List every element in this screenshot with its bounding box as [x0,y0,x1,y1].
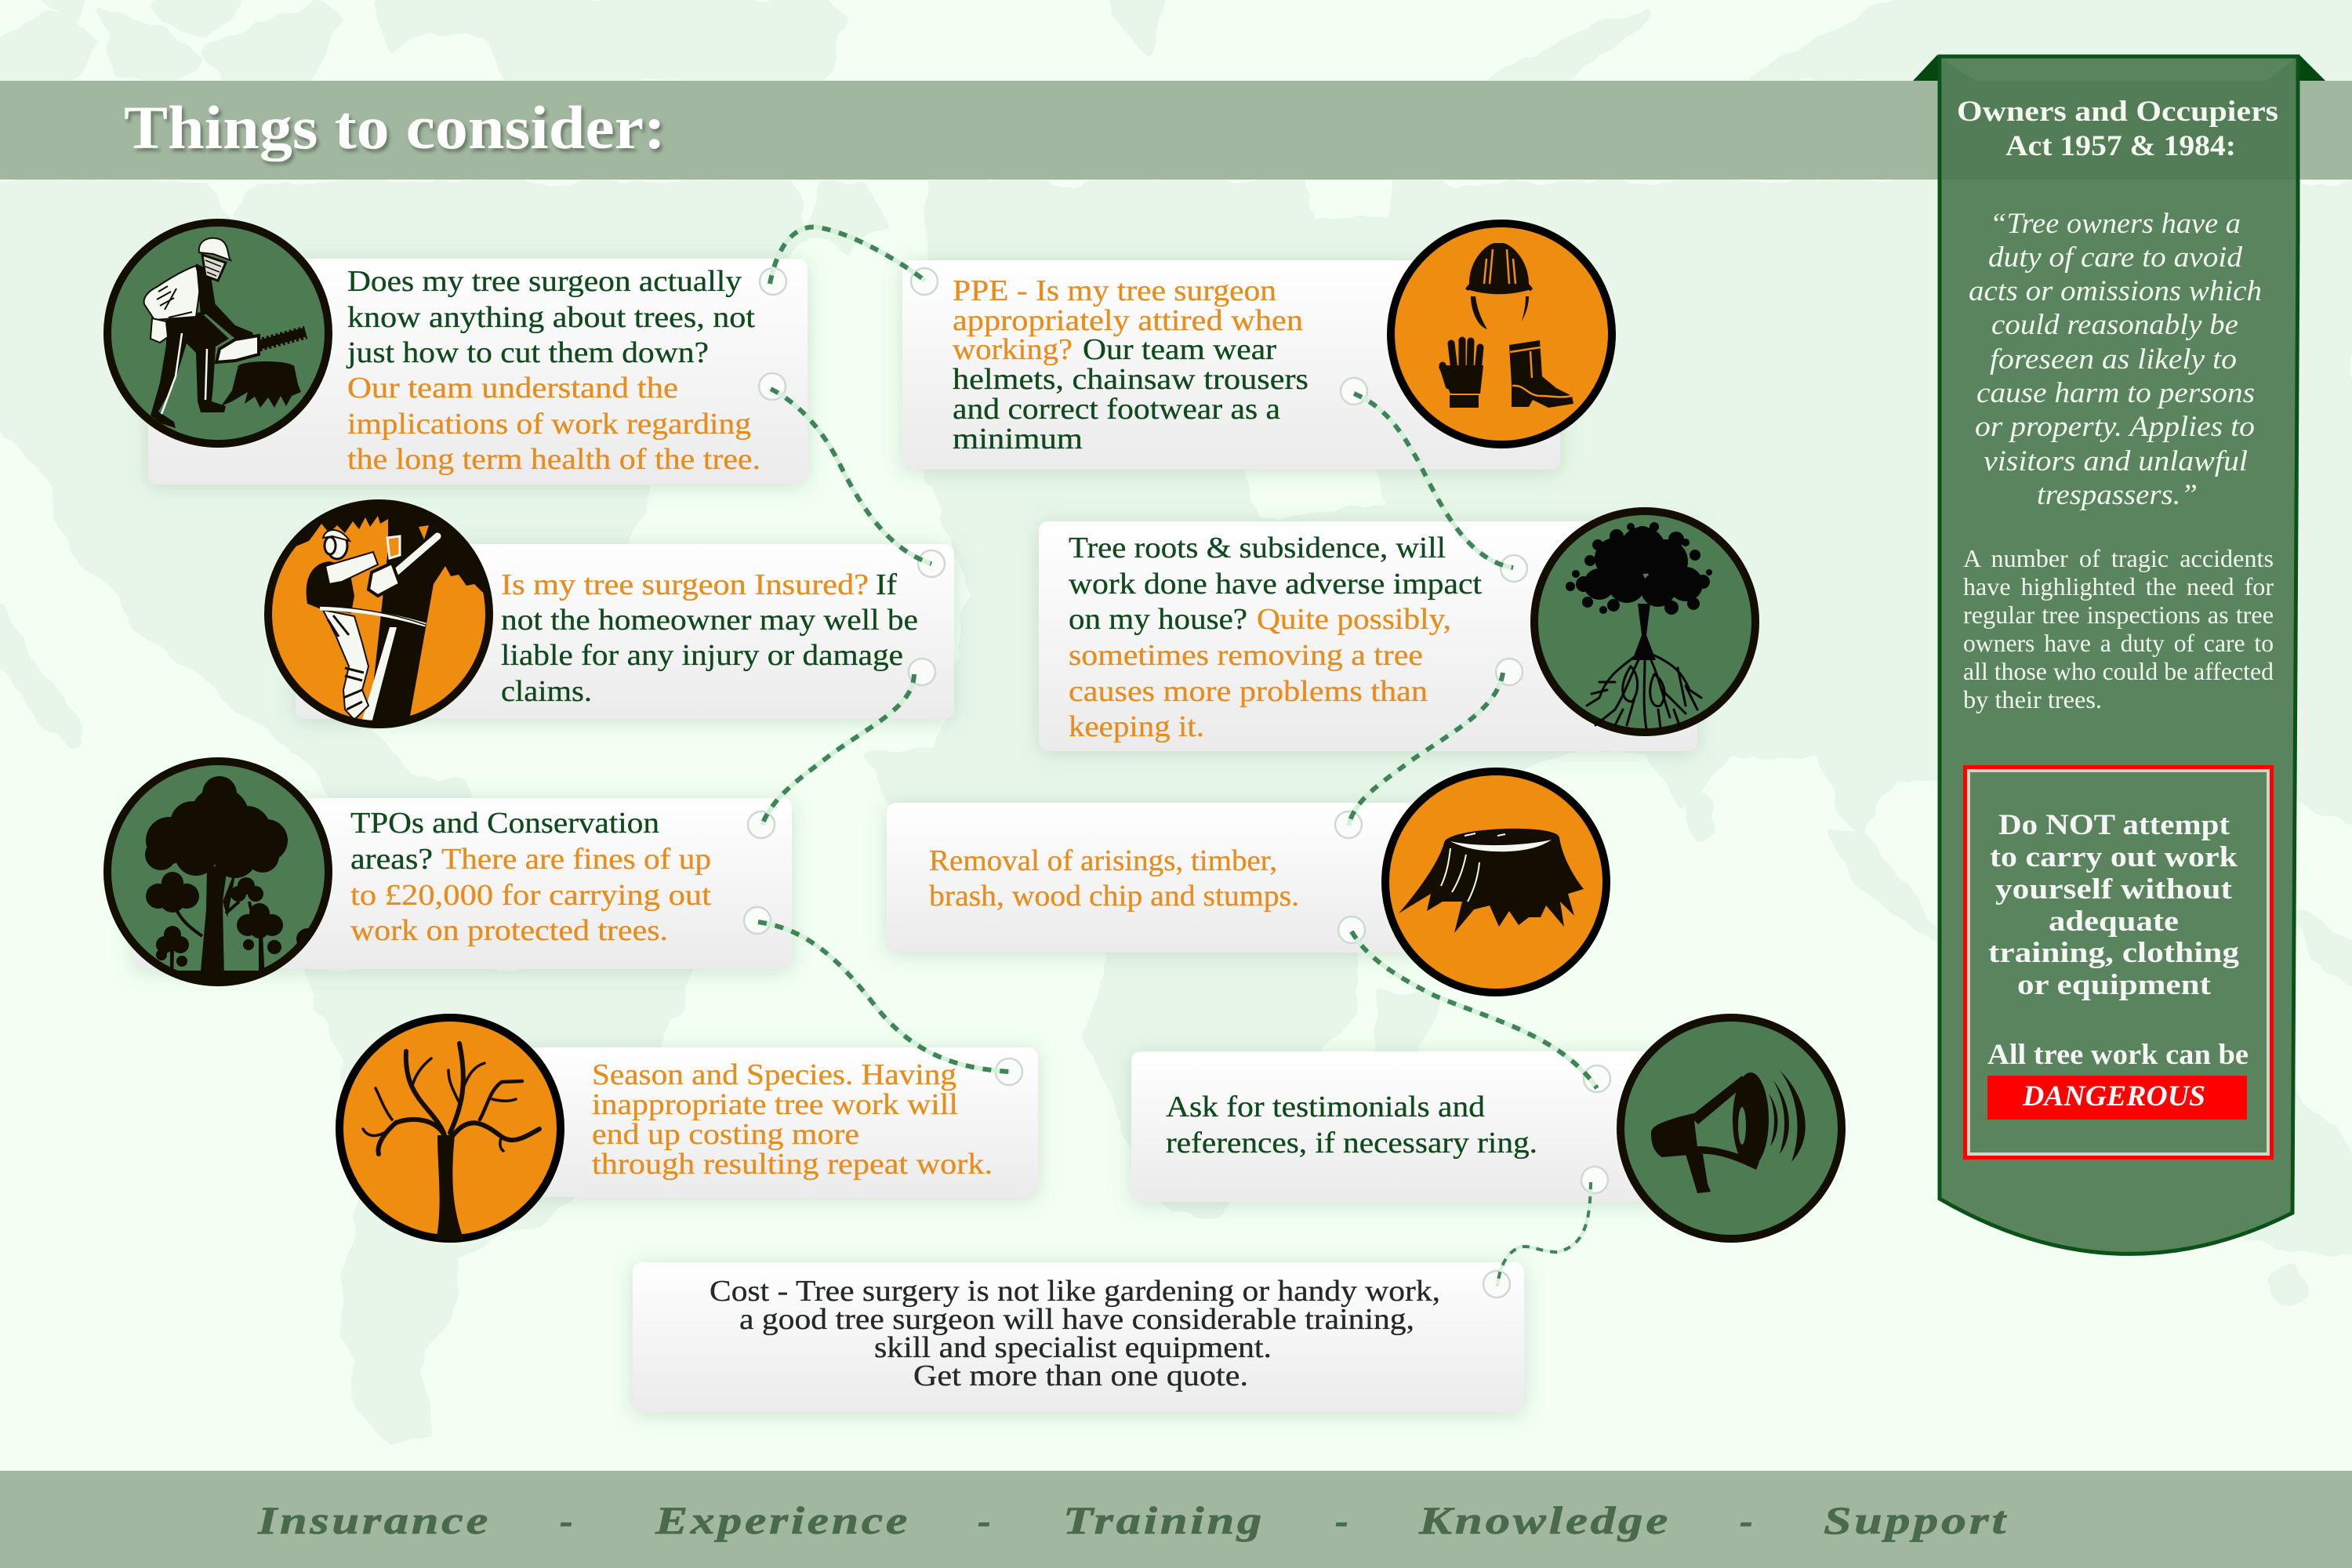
quotation: or property. Applies to [1975,411,2255,443]
card: PPE: and correct footwear as a [953,393,1280,426]
card: tree roots and subsidence: causes more problems than [1069,675,1428,708]
footer values text: Insurance [257,1498,491,1542]
quotation: cause harm to persons [1976,377,2255,409]
card: knowledge of trees: implications of work regarding [347,408,751,441]
panel: owners and occupiers banner [1913,55,2325,1254]
card: PPE: minimum [953,423,1083,456]
card: knowledge of trees: the long term health of the tree. [347,443,760,476]
banner body [1940,56,2298,1254]
dashed thread connectors [758,227,1597,1286]
warning box: training, clothing [1988,937,2240,969]
card: insurance: liable for any injury or damage [501,639,903,672]
card: season and species [517,1047,1038,1197]
quotation: duty of care to avoid [1988,241,2243,274]
card: PPE: helmets, chainsaw trousers [953,363,1308,396]
card: insurance: claims. [501,675,592,708]
card: testimonials: references, if necessary ring. [1166,1127,1537,1160]
quotation: trespassers.” [2037,479,2198,511]
card: cost: skill and specialist equipment. [874,1331,1272,1364]
quotation: acts or omissions which [1969,275,2262,307]
footer values text: - [1740,1498,1755,1542]
body paragraph: owners have a duty of care to [1963,629,2274,657]
card: season and species: inappropriate tree work will [592,1088,958,1121]
card: TPOs [133,798,792,969]
card: removal of arisings [887,803,1514,953]
body paragraph [1963,544,2274,713]
card: TPOs: TPOs and Conservation [350,807,659,840]
footer values text: Support [1824,1498,2009,1542]
quotation: visitors and unlawful [1984,445,2248,477]
card: tree roots and subsidence: work done have adverse impact [1069,568,1482,601]
card: knowledge of trees: Does my tree surgeon actually [347,265,742,298]
card: knowledge of trees: just how to cut them down? [346,336,709,369]
card: knowledge of trees: know anything about trees, not [347,301,755,334]
card: testimonials: Ask for testimonials and [1166,1091,1485,1123]
card: season and species: end up costing more [592,1118,859,1151]
card: testimonials [1131,1051,1790,1202]
icon: tree with roots [1534,511,1755,732]
card: insurance: Is my tree surgeon Insured? [501,568,869,601]
warning box: yourself without [1995,873,2233,906]
footer values text: - [1335,1498,1351,1542]
card: TPOs: areas? [350,843,433,876]
card: insurance: not the homeowner may well be [501,604,918,637]
banner heading: Act 1957 & 1984: [2005,130,2236,162]
card: PPE [902,260,1560,470]
icon: megaphone [1621,1018,1842,1239]
banner fold corners [1913,55,2325,81]
card: insurance [296,544,954,719]
footer values text: Training [1063,1498,1265,1542]
footer values text: - [560,1498,575,1542]
body paragraph: by their trees. [1963,685,2102,713]
quotation: foreseen as likely to [1990,343,2237,376]
icon: hard hat, glove and boot [1391,223,1612,445]
quotation [1969,208,2262,511]
card: tree roots and subsidence: sometimes removing a tree [1069,639,1423,672]
icon: group of trees [107,761,328,994]
warning box: to carry out work [1990,841,2238,873]
card: cost [633,1262,1524,1413]
card: removal of arisings: brash, wood chip and stumps. [929,880,1299,913]
card: tree roots and subsidence: keeping it. [1069,710,1204,743]
card: insurance: If [876,568,897,601]
quotation: “Tree owners have a [1990,208,2241,240]
danger label [1987,1076,2247,1120]
footer values text: Knowledge [1418,1498,1671,1542]
card: tree roots and subsidence [1039,521,1697,751]
icon: bare tree [339,1018,561,1240]
card: tree roots and subsidence: on my house? [1069,603,1247,636]
footer values text: Experience [655,1498,910,1542]
icon: tree stump [1385,771,1606,993]
card: PPE: PPE - Is my tree surgeon [953,274,1276,307]
card: knowledge of trees: Our team understand the [347,372,678,405]
card: PPE: working? [953,333,1073,366]
card: TPOs: There are fines of up [441,843,711,876]
card: cost: Get more than one quote. [913,1359,1248,1392]
card: knowledge of trees [148,259,808,485]
card: season and species: through resulting repeat work. [592,1148,993,1181]
warning box: All tree work can be [1987,1039,2249,1071]
icon: man with chainsaw and stump [107,223,328,444]
quotation: could reasonably be [1991,309,2238,341]
warning box [1965,767,2272,1157]
warning box: or equipment [2017,969,2212,1001]
card: tree roots and subsidence: Quite possibly, [1257,603,1451,636]
body paragraph: all those who could be affected [1963,657,2274,685]
top header band [0,81,2352,180]
card: cost: a good tree surgeon will have considerable training, [739,1303,1414,1336]
card: cost: Cost - Tree surgery is not like gardening or handy work, [710,1275,1440,1308]
eyelet holes [744,268,1610,1298]
body paragraph: regular tree inspections as tree [1963,601,2274,629]
card: PPE: Our team wear [1083,333,1276,366]
body paragraph: have highlighted the need for [1963,572,2274,601]
banner heading [1957,96,2278,162]
warning box: adequate [2049,906,2179,938]
card: removal of arisings: Removal of arisings, timber, [929,844,1277,877]
card: season and species: Season and Species. Having [592,1058,956,1091]
banner heading: Owners and Occupiers [1957,96,2278,128]
card: TPOs: to £20,000 for carrying out [350,879,711,912]
card: tree roots and subsidence: Tree roots & subsidence, will [1069,532,1446,564]
footer values text: - [978,1498,993,1542]
footer band [0,1471,2352,1568]
danger label: DANGEROUS [2022,1080,2205,1112]
body paragraph: A number of tragic accidents [1963,544,2274,572]
icon: climber cutting tree [259,494,502,729]
footer values text [257,1498,2009,1542]
title: Things to consider: [124,93,666,162]
card: TPOs: work on protected trees. [350,914,668,947]
card: PPE: appropriately attired when [953,304,1303,337]
warning box: Do NOT attempt [1998,809,2230,841]
